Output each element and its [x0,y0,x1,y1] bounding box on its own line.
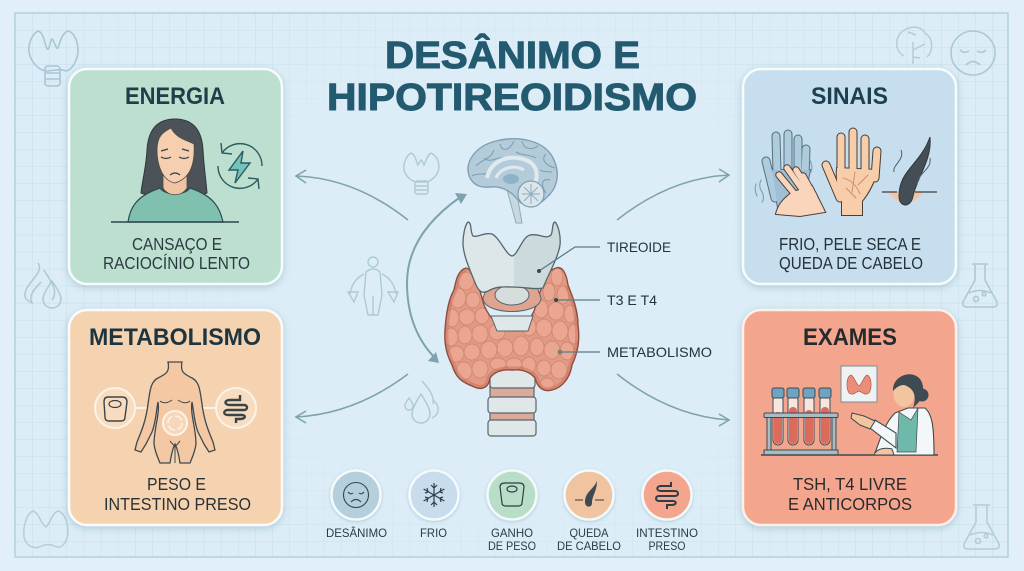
arrow: thyroid to metabolismo [296,374,408,423]
illustration: tired woman [111,119,239,222]
text: tsh t4 livre e anticorpos: TSH, T4 LIVRE [793,474,907,494]
heading: sinais: SINAIS [811,83,888,110]
arrow: brain and thyroid loop [407,193,467,363]
icon: faint thyroid top left [29,31,78,86]
brain [468,139,557,223]
symptom: desanimo [326,470,387,540]
icon: faint sad face [951,31,995,75]
icon: follicle [575,481,604,507]
icon: faint drops centre [405,381,438,423]
symptom: intestino preso [636,470,698,553]
icon: faint thyroid centre [404,153,439,194]
illustration: body [135,362,216,463]
upper trachea rings [483,284,541,331]
illustration: dry palm [826,132,878,215]
icon: energy cycle [218,143,262,189]
symptom: intestino preso: PRESO [648,539,686,553]
icon: bathroom scale [500,483,524,506]
text: cansaco e raciocinio lento [103,234,250,273]
trachea [488,368,536,436]
label: t3 e t4: T3 E T4 [607,292,657,308]
arrow: thyroid to sinais [617,169,729,220]
thyroid cartilage [463,222,560,292]
illustration: test tubes rack [761,388,938,455]
text: frio pele seca e queda de cabelo: QUEDA DE CABELO [779,253,923,273]
heading: energia: ENERGIA [125,83,225,110]
title [327,33,697,119]
symptom: frio: FRIO [420,526,447,540]
thyroid gland lobes [444,268,580,391]
panel: sinais [743,69,956,284]
arrow: thyroid to energia [296,170,408,220]
title: DESÂNIMO E [385,33,640,77]
panel: exames [743,310,956,525]
label: tireoide [537,239,671,273]
illustration: warm hand [776,168,825,216]
symptom: ganho de peso: DE PESO [488,539,536,553]
label: tireoide: TIREOIDE [607,239,671,255]
symptom: ganho de peso [488,470,536,553]
icon: snowflake [424,483,444,507]
illustration: doctor [851,374,934,455]
text: peso e intestino preso: PESO E [147,474,206,494]
text: cansaco e raciocinio lento: RACIOCÍNIO LENTO [103,253,250,273]
heading: exames: EXAMES [803,324,897,351]
symptom: frio [410,470,458,540]
icon: sad face [344,482,368,508]
text: peso e intestino preso: INTESTINO PRESO [104,494,251,514]
title: HIPOTIREOIDISMO [327,77,697,119]
symptom: queda de cabelo: DE CABELO [557,539,621,553]
heading: metabolismo: METABOLISMO [89,324,261,351]
arrow: thyroid to exames [617,374,729,426]
label: metabolismo [558,344,712,360]
symptom: queda de cabelo: QUEDA [570,526,608,540]
icon: intestine [656,482,678,509]
label: t3 e t4 [554,292,657,308]
icon: faint thyroid bottom left [24,511,68,548]
panel: energia [69,69,282,284]
symptom: ganho de peso: GANHO [491,526,533,540]
text: tsh t4 livre e anticorpos: E ANTICORPOS [788,494,912,514]
icon: faint body with arrows [348,257,398,315]
symptom: desanimo: DESÂNIMO [326,525,387,540]
symptom: intestino preso: INTESTINO [636,526,698,540]
icon: faint flame and drop left [25,263,61,308]
label: metabolismo: METABOLISMO [607,344,712,360]
text: tsh t4 livre e anticorpos [788,474,912,514]
illustration: thyroid chart [841,366,877,402]
text: peso e intestino preso [104,474,251,514]
icon: faint flask upper right [963,264,997,307]
symptom: queda de cabelo [557,470,621,553]
icon: faint brain top right [897,27,932,64]
illustration: cold hand [755,134,812,208]
text: frio pele seca e queda de cabelo: FRIO, PELE SECA E [779,234,921,254]
text: frio pele seca e queda de cabelo [779,234,923,273]
icon: faint flask lower right [964,505,999,549]
icon: intestine [216,388,256,428]
illustration: hair follicle [882,137,937,205]
panel: metabolismo [69,310,282,525]
thyroid illustration [444,222,580,436]
text: cansaco e raciocinio lento: CANSAÇO E [132,234,222,254]
icon: scale [95,388,135,428]
